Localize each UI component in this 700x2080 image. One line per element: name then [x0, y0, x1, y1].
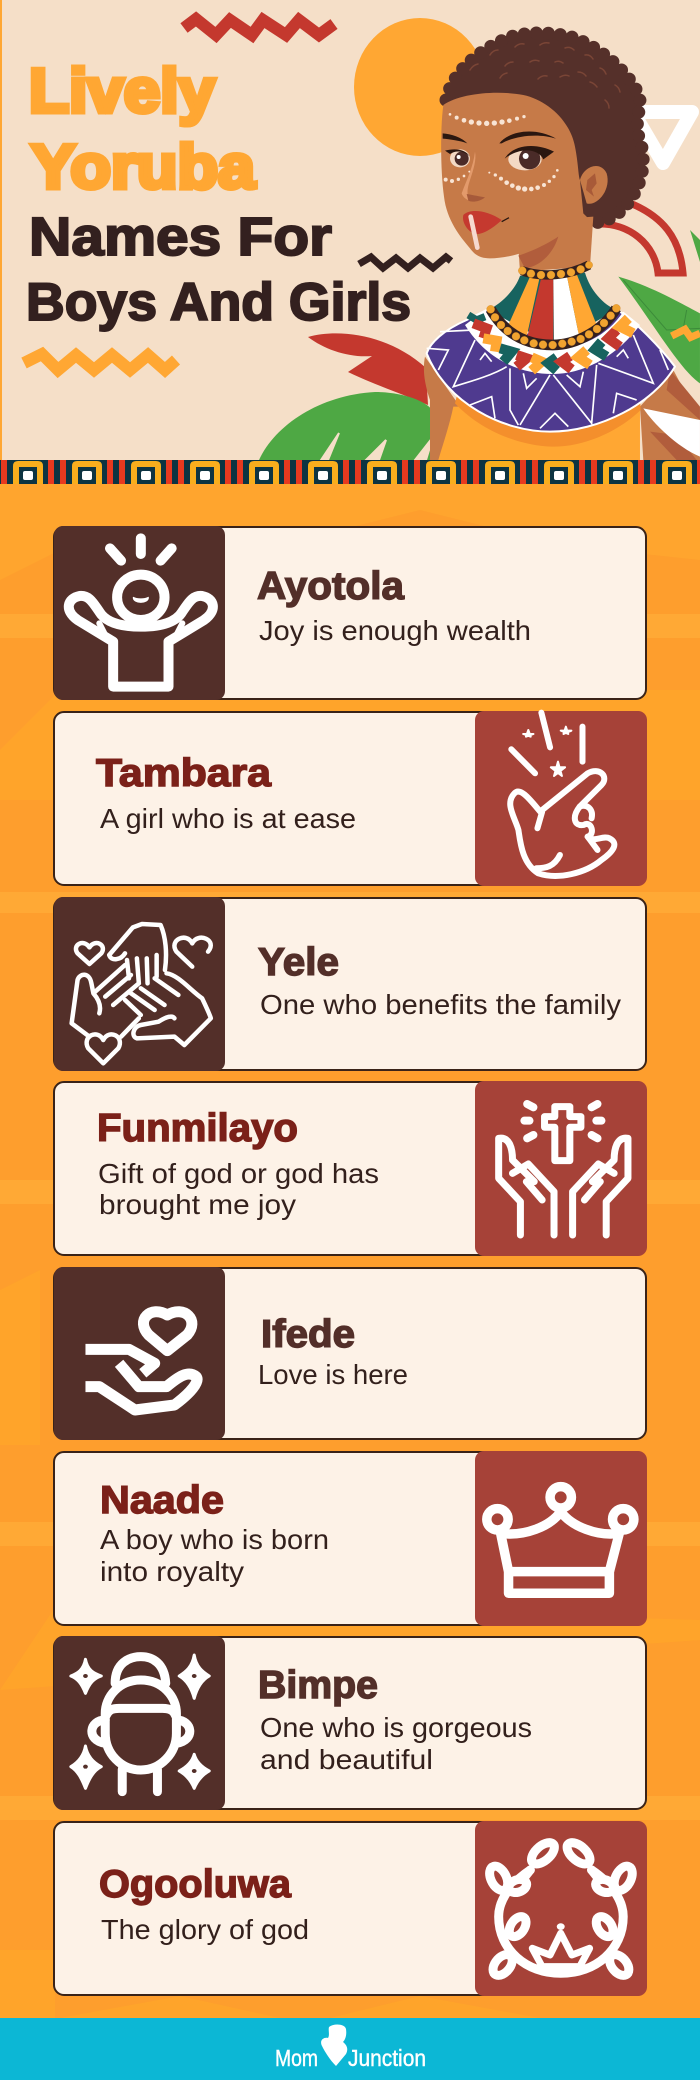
zigzag: red [184, 19, 334, 35]
illustration: woman with decorations [259, 18, 700, 460]
logo: MomJunction [275, 2025, 426, 2071]
icon: crown [487, 1487, 634, 1593]
feather [643, 408, 700, 457]
hair [446, 33, 643, 223]
green leaf left [259, 392, 440, 460]
face paint dots [444, 113, 559, 192]
lips [463, 211, 502, 234]
logo: MomJunction: Junction [348, 2045, 426, 2071]
meaning: A girl who is at ease [100, 803, 356, 834]
purple collar [427, 310, 675, 432]
pattern band [0, 460, 700, 484]
icon: hand holding heart [85, 1312, 197, 1410]
zigzag: orange [24, 354, 176, 370]
meaning: Joy is enough wealth [259, 615, 531, 646]
collar and dress [424, 261, 700, 460]
green leaf right top [690, 230, 700, 262]
name: Bimpe [258, 1664, 378, 1707]
meaning: Gift of god or god has [98, 1158, 379, 1189]
neck [518, 217, 593, 272]
name: Funmilayo [97, 1107, 298, 1150]
red arch [595, 200, 683, 273]
name: Tambara [96, 752, 271, 795]
neck shadow [518, 237, 558, 268]
panel: header background [0, 0, 700, 460]
collar pattern lines [427, 330, 668, 428]
brows [443, 133, 467, 143]
face [441, 93, 608, 272]
title [26, 57, 411, 332]
chevron band [465, 310, 640, 374]
dress [438, 407, 640, 460]
title: Yoruba [31, 133, 256, 202]
meaning [100, 1524, 329, 1587]
card: Funmilayo [54, 1081, 647, 1256]
title: Lively [29, 57, 216, 126]
icon: praying hands and cross [499, 1104, 628, 1235]
zigzag: dark [359, 257, 451, 268]
title: Boys And Girls [26, 273, 411, 332]
name: Naade [100, 1479, 224, 1522]
name: Ayotola [257, 565, 404, 608]
arms [424, 357, 460, 460]
footer [0, 2018, 700, 2080]
card: Ifede [54, 1267, 646, 1440]
meaning [98, 1158, 379, 1220]
nose [462, 152, 475, 200]
card: Ayotola [54, 526, 646, 700]
left edge line [0, 0, 2, 460]
icon: joined hands and hearts [72, 924, 211, 1063]
card: Bimpe [54, 1636, 646, 1810]
title: Names For [29, 207, 332, 267]
panel: orange background [0, 484, 700, 2018]
name: Ifede [261, 1313, 355, 1356]
icon: beautiful girl with sparkles [71, 1655, 209, 1792]
meaning: and beautiful [260, 1744, 433, 1775]
left eye [445, 149, 470, 167]
name: Ogooluwa [99, 1863, 291, 1906]
bead choker [518, 261, 593, 279]
neck stripes [488, 273, 617, 345]
name: Yele [258, 941, 339, 984]
bead necklace lower [487, 304, 620, 349]
card: Yele [54, 897, 646, 1071]
meaning: into royalty [100, 1556, 244, 1587]
meaning: brought me joy [99, 1189, 296, 1220]
white triangle [633, 112, 692, 163]
meaning: One who benefits the family [260, 989, 621, 1020]
hair curls [470, 43, 620, 108]
green leaf right [618, 277, 700, 383]
meaning: A boy who is born [100, 1524, 329, 1555]
head [441, 93, 590, 258]
red leaf [308, 333, 428, 405]
logo: MomJunction: Mom [275, 2045, 318, 2071]
ear [580, 166, 608, 204]
card: Ogooluwa [54, 1821, 647, 1996]
right eye [505, 146, 554, 170]
icon: finger snap [510, 713, 614, 876]
lip stripe [471, 217, 477, 248]
meaning: The glory of god [101, 1914, 309, 1945]
meaning: Love is here [258, 1359, 408, 1390]
meaning: One who is gorgeous [260, 1712, 532, 1743]
orange sun [354, 18, 486, 156]
icon: laurel wreath with crown [486, 1839, 636, 1978]
meaning [260, 1712, 532, 1775]
card: Tambara [54, 711, 647, 886]
icon: joyful person [69, 538, 213, 687]
card: Naade [54, 1451, 647, 1626]
